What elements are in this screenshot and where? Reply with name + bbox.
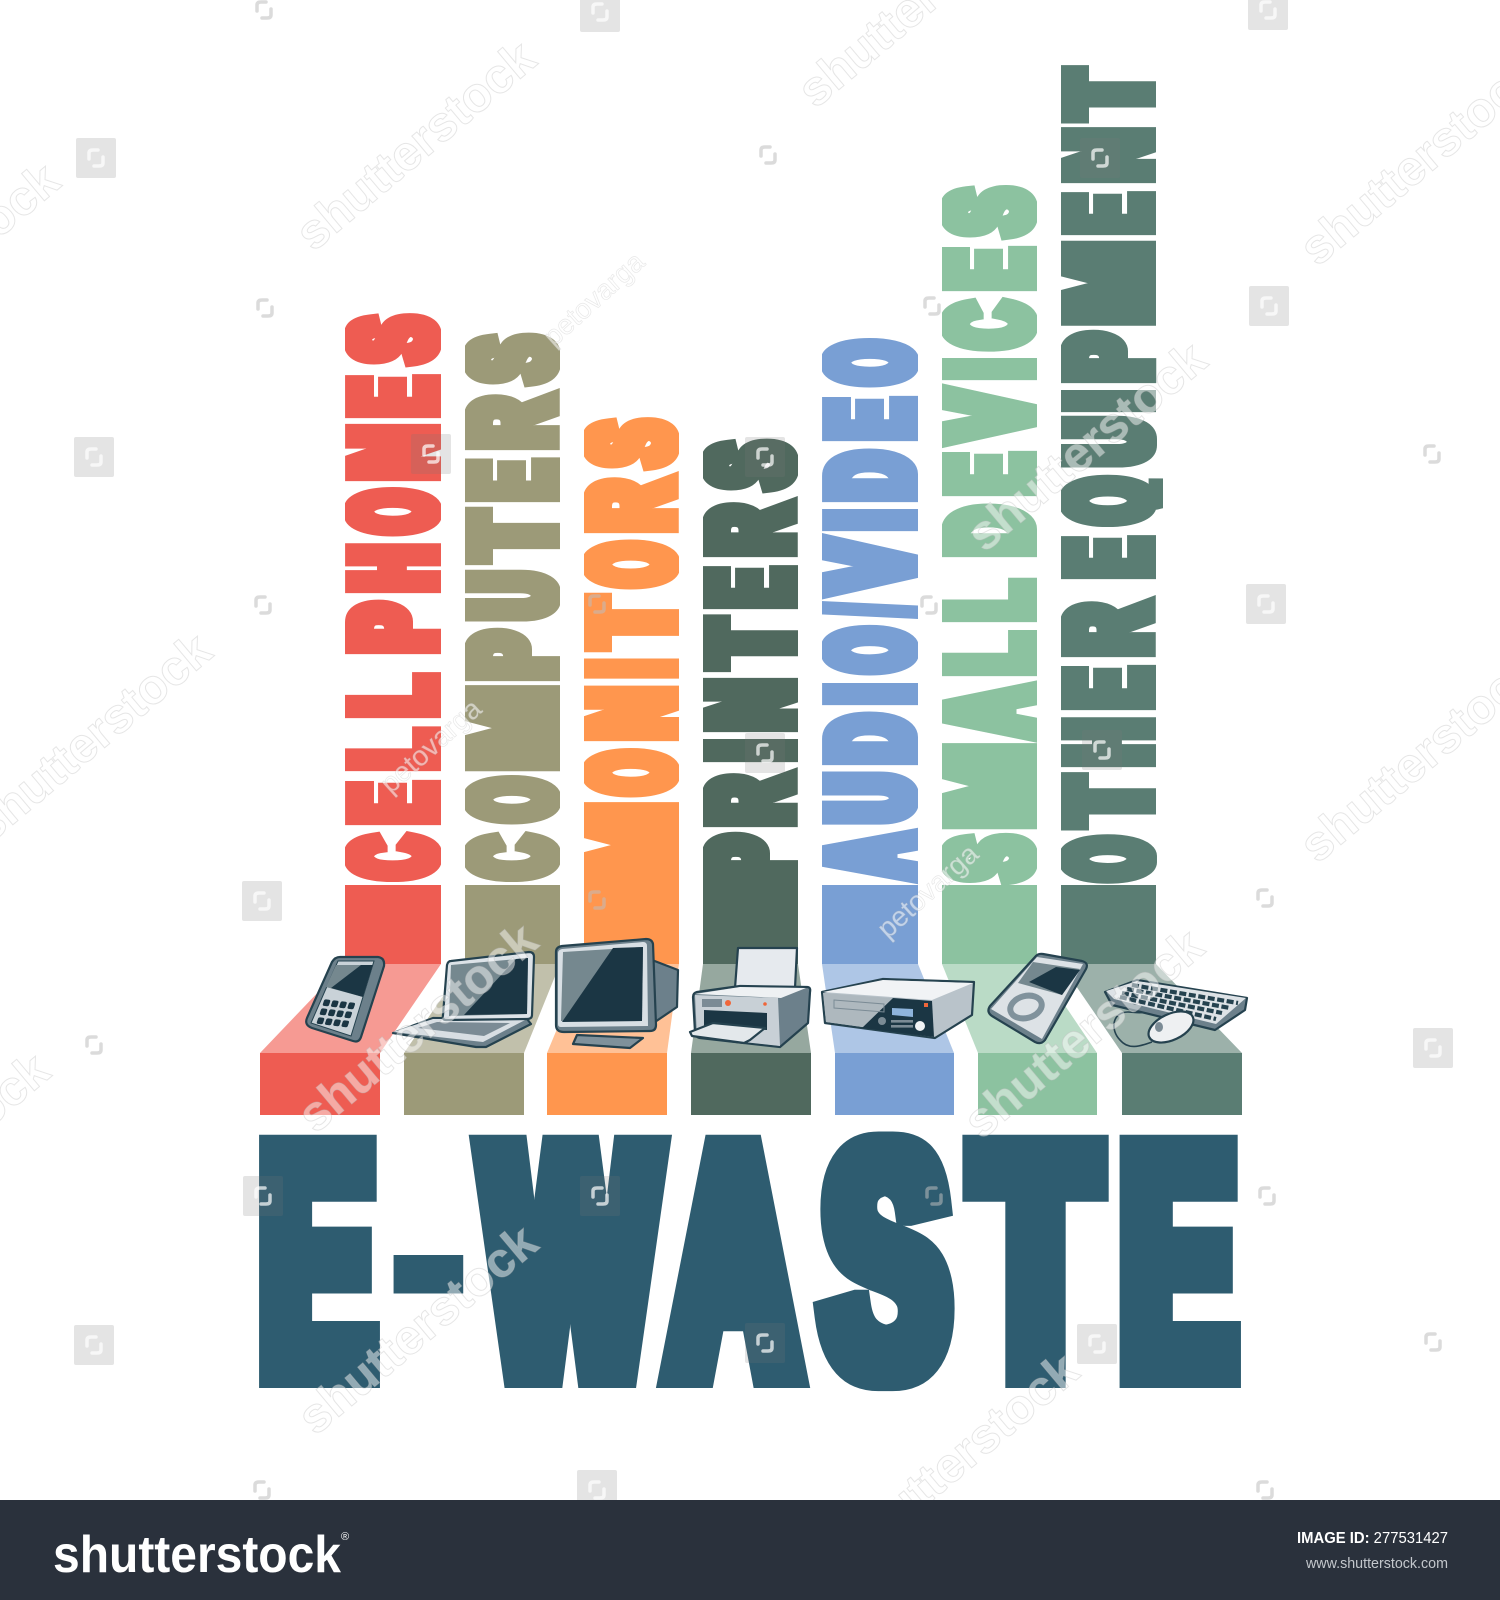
icon: laptop	[393, 952, 534, 1047]
label: small devices: E	[924, 251, 1054, 288]
label: cell phones: H	[328, 546, 458, 590]
title: E-WASTE	[263, 1067, 1232, 1442]
label: monitors: O	[566, 544, 696, 585]
label: other equipment: E	[1043, 540, 1173, 576]
label: other equipment: E	[1043, 670, 1173, 707]
label: other equipment: T	[1043, 72, 1173, 116]
label: small devices: A	[924, 688, 1054, 735]
infographic: e-waste categories: shutterstock	[288, 912, 548, 1143]
infographic: e-waste categories: shutterstock	[286, 30, 546, 261]
label: other equipment: P	[1043, 335, 1173, 380]
label: computers: C	[447, 838, 577, 878]
infographic: e-waste categories: shutterstock	[288, 1214, 548, 1445]
icon: audio video recorder	[822, 979, 974, 1038]
label: small devices: M	[924, 746, 1054, 826]
label: cell phones: P	[328, 605, 458, 651]
label: small devices: L	[924, 635, 1054, 673]
icon: keyboard and mouse	[1105, 980, 1247, 1049]
label: monitors: N	[566, 689, 696, 738]
footer bar	[0, 1500, 1500, 1600]
title: E-WASTE: T	[976, 1082, 1094, 1442]
title: E-WASTE: W	[486, 1082, 656, 1442]
infographic: e-waste categories: shutterstock	[957, 331, 1217, 562]
column: other equipment	[1043, 72, 1242, 1115]
title: E-WASTE: S	[825, 1082, 946, 1442]
label: other equipment: E	[1043, 196, 1173, 232]
label: cell phones: L	[328, 732, 458, 768]
label: other equipment: U	[1043, 419, 1173, 464]
column: printers	[685, 444, 815, 1115]
column: small devices	[924, 190, 1097, 1115]
label: printers: E	[685, 570, 815, 606]
label: monitors: I	[566, 662, 696, 676]
label: audio/video: I	[805, 686, 935, 702]
label: small devices: L	[924, 584, 1054, 619]
infographic: e-waste categories: O	[805, 342, 935, 383]
label: other equipment: M	[1043, 244, 1173, 322]
label: audio/video: /	[805, 606, 935, 614]
footer logo: shutterstock	[53, 1526, 341, 1584]
label: monitors	[584, 417, 679, 885]
footer registered mark: ®	[341, 1531, 349, 1543]
label: monitors: M	[566, 805, 696, 885]
icon: cell phone	[306, 957, 384, 1042]
label: printers: P	[685, 837, 815, 882]
label: computers	[465, 332, 560, 882]
label: other equipment	[1061, 65, 1163, 884]
label: printers: T	[685, 622, 815, 665]
icon: media player	[988, 954, 1087, 1043]
label: cell phones: E	[328, 379, 458, 415]
title: E-WASTE: E	[263, 1082, 372, 1442]
label: other equipment: H	[1043, 720, 1173, 764]
label: computers: S	[447, 338, 577, 381]
infographic: e-waste categories: shutterstock	[829, 1342, 1089, 1573]
label: small devices: I	[924, 361, 1054, 377]
label: printers	[703, 438, 798, 885]
column: audio/video	[822, 338, 954, 1115]
infographic: e-waste categories: petovarga	[374, 692, 488, 799]
label: audio/video: D	[805, 716, 935, 762]
label: computers: T	[447, 514, 577, 558]
label: other equipment: R	[1043, 605, 1173, 654]
label: cell phones: C	[328, 838, 458, 878]
label: other equipment: Q	[1043, 479, 1173, 522]
label: computers: E	[447, 462, 577, 499]
label: audio/video: A	[805, 835, 935, 877]
label: small devices: S	[924, 838, 1054, 880]
label: other equipment: N	[1043, 130, 1173, 180]
infographic: e-waste categories: petovarga	[537, 245, 651, 352]
title: E-WASTE: E	[1124, 1082, 1232, 1442]
label: monitors: T	[566, 600, 696, 645]
label: small devices: V	[924, 392, 1054, 439]
label: monitors: R	[566, 481, 696, 530]
label: cell phones: O	[328, 491, 458, 532]
label: audio/video: E	[805, 401, 935, 438]
label: printers: I	[685, 742, 815, 759]
column: monitors	[547, 417, 679, 1115]
title: E-WASTE: -	[392, 1067, 465, 1427]
label: cell phones: E	[328, 785, 458, 822]
label: small devices	[942, 185, 1037, 885]
label: cell phones: N	[328, 427, 458, 478]
infographic: e-waste categories: shutterstock	[954, 918, 1214, 1149]
label: monitors: O	[566, 752, 696, 793]
title: E-WASTE: A	[670, 1082, 796, 1442]
label: small devices: C	[924, 304, 1054, 347]
label: other equipment: O	[1043, 839, 1173, 879]
label: printers: S	[685, 444, 815, 487]
label: audio/video: D	[805, 453, 935, 499]
label: printers: R	[685, 506, 815, 554]
label: small devices: D	[924, 508, 1054, 554]
label: audio/video: O	[805, 629, 935, 671]
label: other equipment: I	[1043, 393, 1173, 409]
icon: monitor	[556, 939, 678, 1048]
label: computers: P	[447, 633, 577, 678]
label: small devices: E	[924, 456, 1054, 493]
label: monitors: S	[566, 422, 696, 465]
website: www.shutterstock.com	[1305, 1555, 1448, 1572]
label: cell phones	[345, 313, 441, 882]
label: printers: N	[685, 681, 815, 729]
image id: IMAGE ID: 277531427	[1297, 1530, 1448, 1547]
label: computers: M	[447, 688, 577, 768]
label: cell phones: L	[328, 679, 458, 715]
label: audio/video: U	[805, 775, 935, 821]
icon: printer	[690, 948, 810, 1047]
label: audio/video: I	[805, 512, 935, 528]
column: computers	[404, 338, 577, 1115]
infographic: e-waste categories: petovarga	[871, 837, 985, 944]
label: computers: U	[447, 573, 577, 618]
label: small devices: S	[924, 190, 1054, 234]
label: audio/video: V	[805, 542, 935, 590]
label: computers: R	[447, 398, 577, 447]
label: other equipment: T	[1043, 779, 1173, 823]
column: cell phones	[260, 318, 458, 1115]
label: audio/video	[822, 338, 918, 884]
label: printers: R	[685, 777, 815, 824]
label: computers: O	[447, 779, 577, 820]
label: cell phones: S	[328, 318, 458, 361]
